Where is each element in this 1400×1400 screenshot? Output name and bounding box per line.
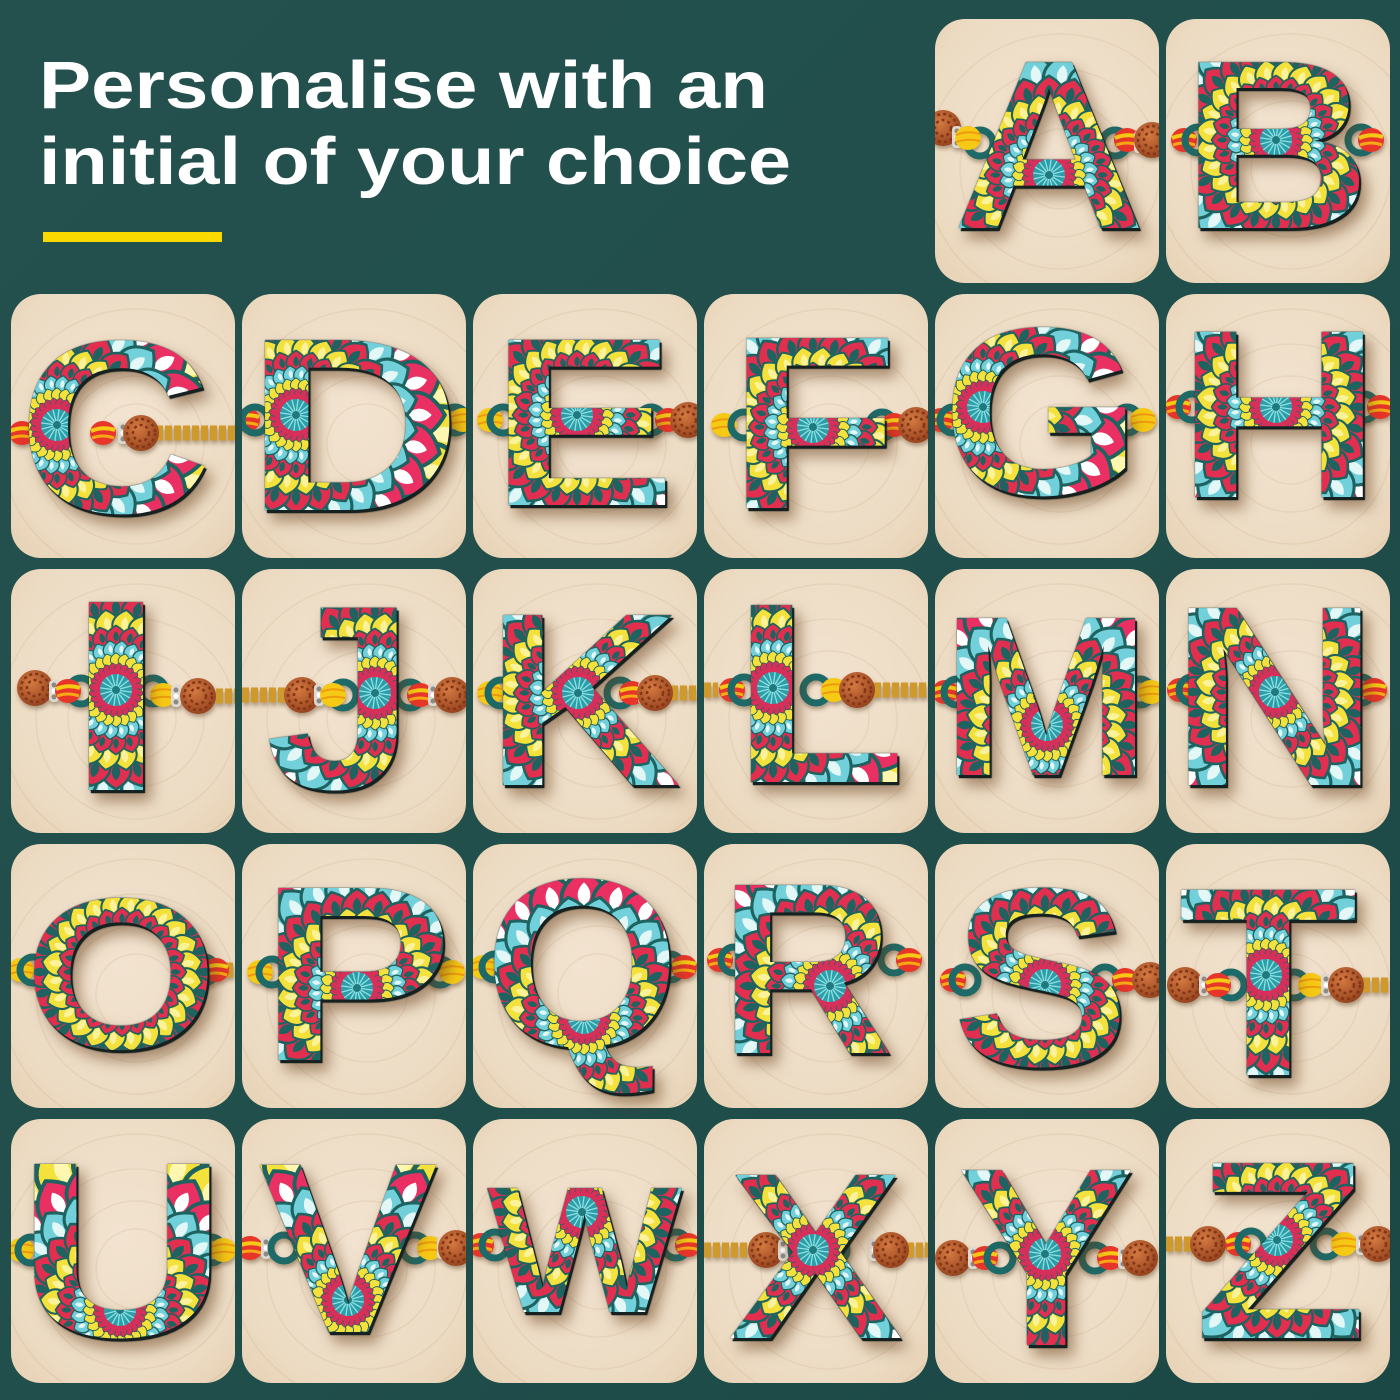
yellow accent bar	[43, 232, 222, 242]
tile: letter G	[935, 294, 1159, 558]
letter V	[71, 992, 656, 1391]
tile: letter B	[1166, 19, 1390, 283]
letter I	[0, 382, 424, 998]
tile: letter R	[522, 678, 1138, 1294]
tile: letter J	[67, 385, 683, 1001]
letter X	[536, 942, 1121, 1395]
tile: letter H	[1166, 294, 1390, 558]
letter H	[968, 99, 1400, 715]
letter G	[950, 326, 1142, 516]
letter C	[26, 338, 219, 534]
title	[39, 48, 791, 199]
tile: letter W	[305, 904, 890, 1400]
tile: letter Z	[1000, 932, 1400, 1400]
tile: letter U	[0, 1002, 428, 1400]
letter P	[49, 680, 665, 1296]
tile: letter D	[242, 294, 466, 558]
tile: letter C	[11, 294, 235, 558]
tile: letter P	[49, 680, 665, 1296]
tile: letter Y	[768, 946, 1353, 1400]
tile: letter I	[0, 382, 424, 998]
tile: letter A	[935, 19, 1159, 283]
tile: letter F	[704, 294, 928, 558]
letter J	[67, 385, 683, 1001]
letter O	[0, 664, 430, 1280]
letter F	[743, 336, 905, 528]
tile: letter V	[71, 992, 656, 1400]
letter Y	[768, 946, 1353, 1399]
tile: letter K	[270, 385, 886, 1001]
title: initial of your choice	[39, 124, 791, 199]
letter T	[958, 667, 1400, 1283]
letter W	[305, 904, 890, 1357]
tile: letter M	[739, 417, 1355, 1033]
letter R	[522, 678, 1138, 1294]
title: Personalise with an	[39, 48, 768, 123]
letter S	[737, 677, 1353, 1293]
tile: letter T	[958, 667, 1400, 1283]
tile: letter O	[0, 664, 430, 1280]
letter K	[270, 385, 886, 1001]
letter D	[262, 338, 466, 530]
letter B	[1195, 60, 1376, 248]
letter M	[739, 417, 1355, 1033]
letter U	[0, 1002, 428, 1400]
letter A	[958, 60, 1152, 248]
letter N	[967, 384, 1400, 1000]
tile: letter S	[737, 677, 1353, 1293]
letter Z	[1000, 932, 1400, 1385]
tile: letter E	[473, 294, 697, 558]
tile: letter L	[465, 380, 1081, 996]
tile: letter Q	[276, 710, 892, 1326]
letter Q	[276, 710, 892, 1326]
letter L	[465, 380, 1081, 996]
tile: letter X	[536, 942, 1121, 1400]
tile: letter N	[967, 384, 1400, 1000]
letter E	[505, 338, 682, 526]
